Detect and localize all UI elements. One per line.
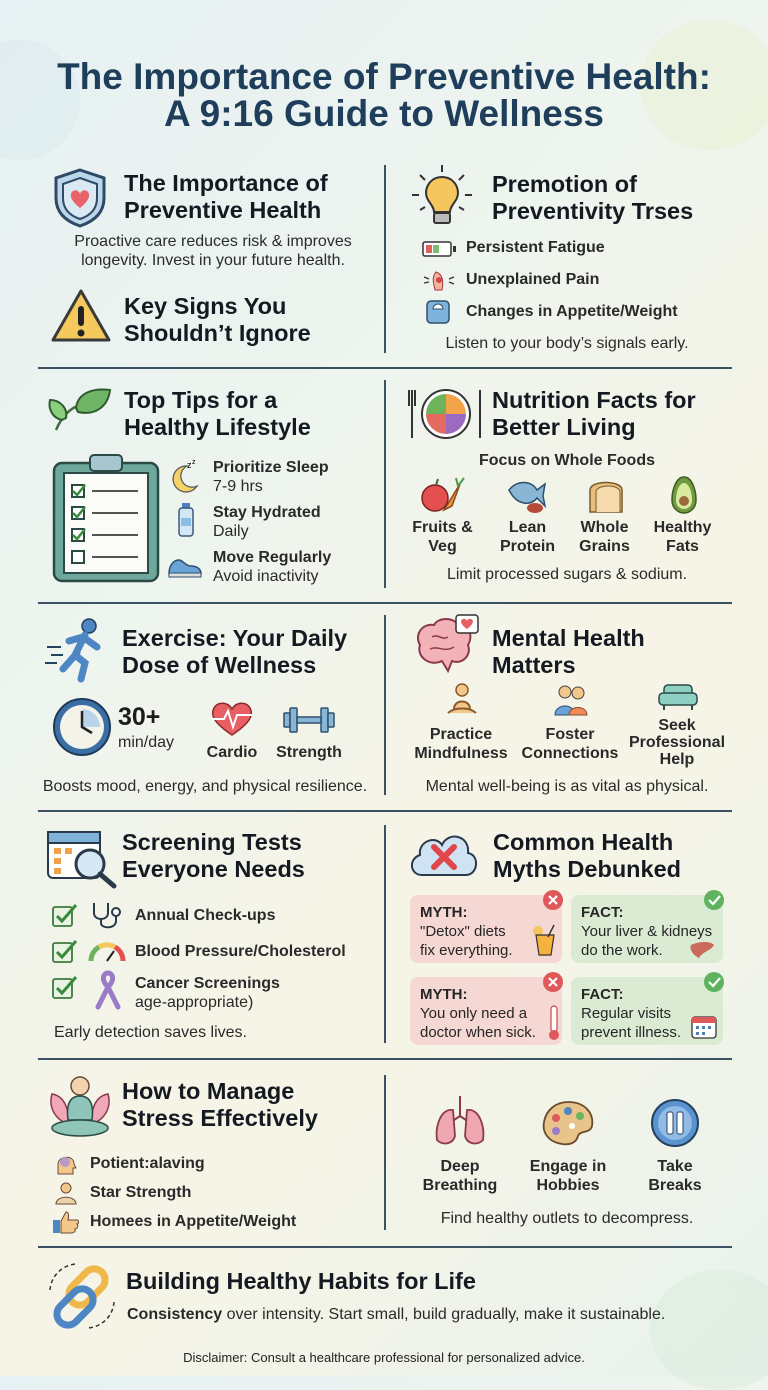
panel: healthy habits [42, 1258, 742, 1333]
heading: myths: Myths Debunked [493, 856, 681, 882]
item: fats: Healthy [654, 519, 711, 536]
item: appetite: Changes in Appetite/Weight [466, 303, 678, 320]
heading: nutrition: Better Living [492, 414, 636, 440]
heading: nutrition: Nutrition Facts for [492, 387, 696, 413]
item: fruits: Veg [428, 538, 457, 555]
text: limit: Limit processed sugars & sodium. [447, 566, 687, 583]
item: sleep [172, 459, 329, 495]
panel: screening [47, 829, 346, 1041]
icon: check badge [703, 971, 725, 993]
heading: key signs: Key Signs You [124, 293, 286, 319]
icon: x badge [542, 971, 564, 993]
item: hobbies [518, 1090, 618, 1190]
item: deep breathing: Breathing [423, 1177, 497, 1194]
heading: mental: Matters [492, 652, 576, 678]
heading: top tips [124, 387, 311, 440]
panel: myths [400, 823, 735, 1048]
item: hobbies: Engage in [530, 1158, 606, 1175]
card: fact visits: FACT: [581, 986, 624, 1003]
icon: x badge [542, 889, 564, 911]
heading: mental: Mental Health [492, 625, 645, 651]
item: blood pressure: Blood Pressure/Cholesterol [135, 943, 346, 960]
item: move: Avoid inactivity [213, 568, 319, 585]
heading: stress: Stress Effectively [122, 1105, 318, 1131]
title: A 9:16 Guide to Wellness [164, 93, 604, 134]
item: sleep: z [192, 459, 196, 466]
icon: leaf [48, 388, 112, 430]
heading: importance: Preventive Health [124, 197, 321, 223]
item: pain: Unexplained Pain [466, 271, 599, 288]
item: potient [52, 1152, 352, 1176]
text: proactive care: longevity. Invest in your future health. [81, 252, 345, 269]
heading: nutrition [492, 387, 696, 440]
text: early detection: Early detection saves lives. [54, 1024, 247, 1041]
item: deep breathing [410, 1090, 510, 1190]
item: protein [500, 482, 555, 555]
item: deep breathing: Deep [440, 1158, 480, 1175]
item: star strength: Star Strength [90, 1184, 191, 1201]
heading: importance: The Importance of [124, 170, 328, 196]
item: pain [424, 271, 599, 290]
icon: clock [53, 698, 111, 756]
card: myth doctor: You only need a [420, 1005, 527, 1022]
item: move [168, 549, 332, 585]
item: hydrated [178, 503, 321, 540]
heading: myths [493, 829, 681, 883]
item: cardio: Cardio [207, 744, 257, 761]
panel: decompress [400, 1090, 735, 1230]
icon: check badge [703, 889, 725, 911]
card: myth doctor: doctor when sick. [420, 1024, 536, 1041]
heading: exercise: Dose of Wellness [122, 652, 316, 678]
item: strength: Strength [276, 744, 342, 761]
panel: top tips [48, 387, 332, 585]
card: fact liver [571, 895, 723, 963]
icon: clipboard [52, 454, 160, 582]
item: cancer [52, 973, 372, 1013]
item: move: Move Regularly [213, 549, 331, 566]
item: connections [522, 686, 618, 762]
text: consistency: Consistency over intensity. Start small, build gradually, make it sustainable. [127, 1306, 665, 1323]
item: connections: Foster [546, 726, 594, 743]
heading: screening: Screening Tests [122, 829, 302, 855]
panel: importance [52, 168, 352, 346]
panel: mental health [414, 614, 725, 795]
heading: importance [124, 170, 328, 223]
panel: exercise: min/day [118, 734, 174, 751]
decorative blobs [640, 20, 768, 150]
item: fruits [412, 477, 473, 555]
item: sleep: 7-9 hrs [213, 478, 263, 495]
heading: key signs: Shouldn’t Ignore [124, 320, 311, 346]
item: hydrated: Stay Hydrated [213, 504, 321, 521]
item: annual: Annual Check-ups [135, 907, 275, 924]
text: find outlets: Find healthy outlets to decompress. [441, 1210, 693, 1227]
item: cancer: Cancer Screenings [135, 975, 280, 992]
card: myth doctor: MYTH: [420, 986, 468, 1003]
item: fatigue: Persistent Fatigue [466, 239, 605, 256]
item: hobbies: Hobbies [536, 1177, 600, 1194]
panel: exercise [43, 618, 367, 795]
item: appetite [426, 300, 678, 324]
card: myth detox [410, 895, 562, 963]
text: boosts: Boosts mood, energy, and physical resilience. [43, 778, 367, 795]
title [57, 56, 711, 134]
icon: bulb [412, 165, 472, 224]
title: The Importance of Preventive Health: [57, 56, 711, 97]
icon: shield [54, 168, 106, 228]
text: 30+: 30+ [118, 703, 160, 731]
item: homees: Homees in Appetite/Weight [90, 1213, 296, 1230]
item: fruits: Fruits & [412, 519, 473, 536]
item: protein: Lean [509, 519, 546, 536]
item: grains: Whole [580, 519, 628, 536]
icon: chain [46, 1260, 118, 1332]
item: annual [52, 901, 372, 929]
heading: premotion: Preventivity Trses [492, 198, 693, 224]
item: grains: Grains [579, 538, 630, 555]
heading: screening [122, 829, 305, 883]
item: sleep: Prioritize Sleep [213, 459, 329, 476]
item: blood pressure [52, 937, 382, 965]
icon: meditation [46, 1074, 114, 1140]
item: star strength [52, 1181, 352, 1205]
item: fats [654, 476, 712, 555]
item: breaks: Take [657, 1158, 693, 1175]
item: professional: Professional [629, 734, 725, 751]
item: grains [579, 482, 630, 555]
heading: premotion: Premotion of [492, 171, 637, 197]
card: fact visits: Regular visits [581, 1005, 671, 1022]
item: sleep: z [187, 460, 192, 470]
text: proactive care: Proactive care reduces risk & improves [74, 233, 352, 250]
heading: top tips: Healthy Lifestyle [124, 414, 311, 440]
item: fats: Fats [666, 538, 699, 555]
text: listen: Listen to your body’s signals early. [445, 335, 689, 352]
item: professional: Seek [658, 717, 696, 734]
card: myth doctor [410, 977, 562, 1045]
item: mindfulness [414, 683, 508, 762]
item: homees [52, 1210, 352, 1234]
item: hydrated: Daily [213, 523, 249, 540]
card: fact visits: prevent illness. [581, 1024, 681, 1041]
item: professional [629, 684, 725, 768]
heading: premotion [492, 171, 693, 224]
icon: warning [52, 289, 111, 342]
item: professional: Help [660, 751, 694, 768]
icon: runner [45, 618, 100, 682]
card: myth detox: MYTH: [420, 904, 468, 921]
text: whole foods: Focus on Whole Foods [479, 452, 655, 469]
heading: stress: How to Manage [122, 1078, 294, 1104]
text: mental well-being: Mental well-being is as vital as physical. [426, 778, 708, 795]
card: fact liver: Your liver & kidneys [581, 923, 712, 940]
item: cardio [207, 702, 257, 761]
icon: brain [416, 614, 479, 674]
item: cancer: age-appropriate) [135, 994, 253, 1011]
text: proactive care [74, 233, 352, 269]
heading: top tips: Top Tips for a [124, 387, 277, 413]
icon: plate [408, 389, 481, 439]
item: mindfulness: Mindfulness [414, 745, 508, 762]
heading: exercise [122, 625, 347, 678]
icon: cloud x [408, 825, 480, 881]
item: mindfulness: Practice [430, 726, 492, 743]
heading: myths: Common Health [493, 829, 673, 855]
heading: habits: Building Healthy Habits for Life [126, 1268, 476, 1294]
heading: stress [122, 1078, 318, 1132]
disclaimer: Disclaimer: Consult a healthcare professional for personalized advice. [183, 1350, 585, 1365]
item: breaks [625, 1090, 725, 1190]
heading: mental [492, 625, 645, 678]
heading: key signs [124, 293, 311, 346]
icon: calendar magnifier [46, 826, 118, 888]
item: potient: Potient:alaving [90, 1155, 205, 1172]
item: breaks: Breaks [648, 1177, 702, 1194]
card: fact visits [571, 977, 723, 1045]
panel: stress [42, 1072, 380, 1237]
heading: screening: Everyone Needs [122, 856, 305, 882]
card: fact liver: FACT: [581, 904, 624, 921]
item: strength [276, 707, 342, 761]
card: myth detox: "Detox" diets [420, 923, 506, 940]
heading: exercise: Exercise: Your Daily [122, 625, 347, 651]
panel: signs list [412, 165, 693, 352]
item: connections: Connections [522, 745, 618, 762]
card: fact liver: do the work. [581, 942, 663, 959]
card: myth detox: fix everything. [420, 942, 513, 959]
panel: nutrition [408, 387, 712, 583]
item: protein: Protein [500, 538, 555, 555]
